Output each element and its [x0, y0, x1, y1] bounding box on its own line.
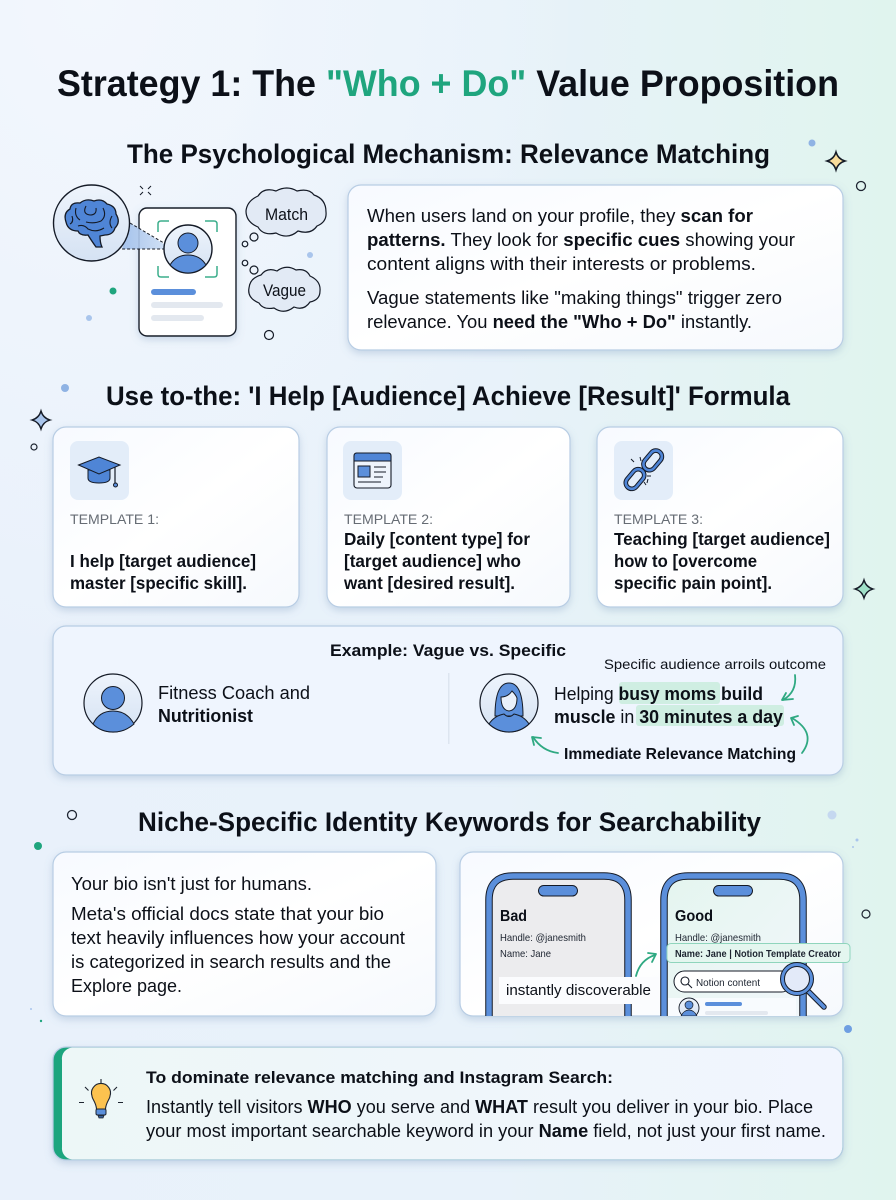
panel: template 2: TEMPLATE 2: [344, 511, 433, 527]
panel: bio text: text heavily influences how your account [71, 928, 405, 948]
profile result [668, 998, 790, 1016]
icon: vague avatar [84, 674, 142, 732]
heading: keywords: Niche-Specific Identity Keywords for Searchability [138, 807, 761, 837]
icon: brain [54, 185, 130, 261]
highlighted specific bio text: muscle in 30 minutes a day [554, 707, 783, 727]
panel: template 2: Daily [content type] for [344, 529, 530, 549]
icon: scan sparkle [140, 186, 151, 195]
panel: bio text: Explore page. [71, 976, 182, 996]
panel: template 2: [target audience] who [344, 551, 521, 571]
panel: mechanism text: Vague statements like "making things" trigger zero [367, 288, 782, 308]
highlighted specific bio text [554, 682, 784, 727]
thought bubbles [242, 233, 274, 340]
arrow: bad to good [636, 953, 656, 976]
panel: phone comparison [460, 852, 850, 1030]
callout text: your most important searchable keyword in your Name field, not just your first name. [146, 1121, 826, 1141]
icon: light bulb [79, 1079, 123, 1118]
phone: good: Good [675, 908, 713, 925]
panel: mechanism text: content aligns with their interests or problems. [367, 254, 756, 274]
panel: template 3: TEMPLATE 3: [614, 511, 703, 527]
phone: bad: Bad [500, 908, 527, 925]
panel: mechanism text: relevance. You need the "Who + Do" instantly. [367, 312, 752, 332]
vague bio text: Fitness Coach and [158, 683, 310, 703]
search field [674, 971, 792, 992]
decorative sparkles and dots [30, 140, 873, 1033]
panel: bio text: Your bio isn't just for humans. [71, 874, 312, 894]
thought cloud: match [246, 188, 326, 236]
panel: template 2: want [desired result]. [343, 573, 515, 593]
name field highlight: Name: Jane | Notion Template Creator [675, 948, 841, 960]
label: instantly discoverable [499, 977, 659, 1004]
icon: avatar [164, 225, 212, 273]
panel: mechanism text: patterns. They look for specific cues showing your [367, 230, 795, 250]
panel: template 3 [597, 427, 843, 607]
panel: example vague vs specific [53, 626, 843, 775]
panel: template 1 [53, 427, 299, 607]
name field highlight [667, 944, 850, 962]
callout text: To dominate relevance matching and Instagram Search: [146, 1068, 613, 1087]
phone: bad [489, 876, 628, 1030]
annotation: immediate relevance matching: Immediate Relevance Matching [564, 746, 796, 763]
thought cloud: vague: Vague [263, 282, 306, 300]
panel: bio text [53, 852, 436, 1016]
panel: template 3: specific pain point]. [614, 573, 772, 593]
vague bio text: Nutritionist [158, 706, 253, 726]
title: Strategy 1: The "Who + Do" Value Proposition [57, 63, 839, 104]
phone: good: Handle: @janesmith [675, 932, 761, 944]
panel: template 1: I help [target audience] [70, 551, 256, 571]
icon: profile card [139, 208, 236, 336]
search field: Notion content [696, 977, 760, 989]
thought cloud: match: Match [265, 206, 308, 224]
phone: good [664, 876, 803, 1030]
thought cloud: vague [249, 267, 320, 311]
callout text: Instantly tell visitors WHO you serve and WHAT result you deliver in your bio. Place [146, 1097, 813, 1117]
highlighted specific bio text: Helping busy moms build [554, 684, 763, 704]
panel: mechanism text [348, 185, 843, 350]
icon: graduation cap [70, 441, 129, 500]
vague bio text [158, 683, 310, 726]
phone: bad: Handle: @janesmith [500, 932, 586, 944]
icon: web page [343, 441, 402, 500]
beam from brain to avatar [122, 223, 172, 249]
panel: bio text: is categorized in search results and the [71, 952, 391, 972]
example heading: Example: Vague vs. Specific [330, 641, 566, 660]
panel: mechanism text: When users land on your profile, they scan for [367, 206, 753, 226]
panel: bio text: Meta's official docs state that your bio [71, 904, 384, 924]
icon: broken chain [614, 441, 673, 500]
callout inner surface [62, 1048, 842, 1159]
heading: psychological mechanism: The Psychological Mechanism: Relevance Matching [127, 139, 770, 169]
panel: template 1: TEMPLATE 1: [70, 511, 159, 527]
panel: takeaway callout [53, 1047, 843, 1160]
label: instantly discoverable: instantly discoverable [506, 982, 651, 999]
callout text [146, 1068, 826, 1141]
phone: bad: Name: Jane [500, 948, 551, 960]
panel: template 2 [327, 427, 570, 607]
panel: template 3: Teaching [target audience] [614, 529, 830, 549]
arrows to highlights [532, 675, 808, 753]
illustration: relevance matching profile scan [54, 185, 326, 340]
icon: specific avatar [480, 674, 538, 732]
heading: formula: Use to-the: 'I Help [Audience] Achieve [Result]' Formula [106, 381, 791, 411]
panel: template 3: how to [overcome [614, 551, 757, 571]
annotation: specific audience: Specific audience arroils outcome [604, 656, 826, 672]
panel: template 1: master [specific skill]. [70, 573, 247, 593]
icon: magnifier [782, 964, 824, 1007]
